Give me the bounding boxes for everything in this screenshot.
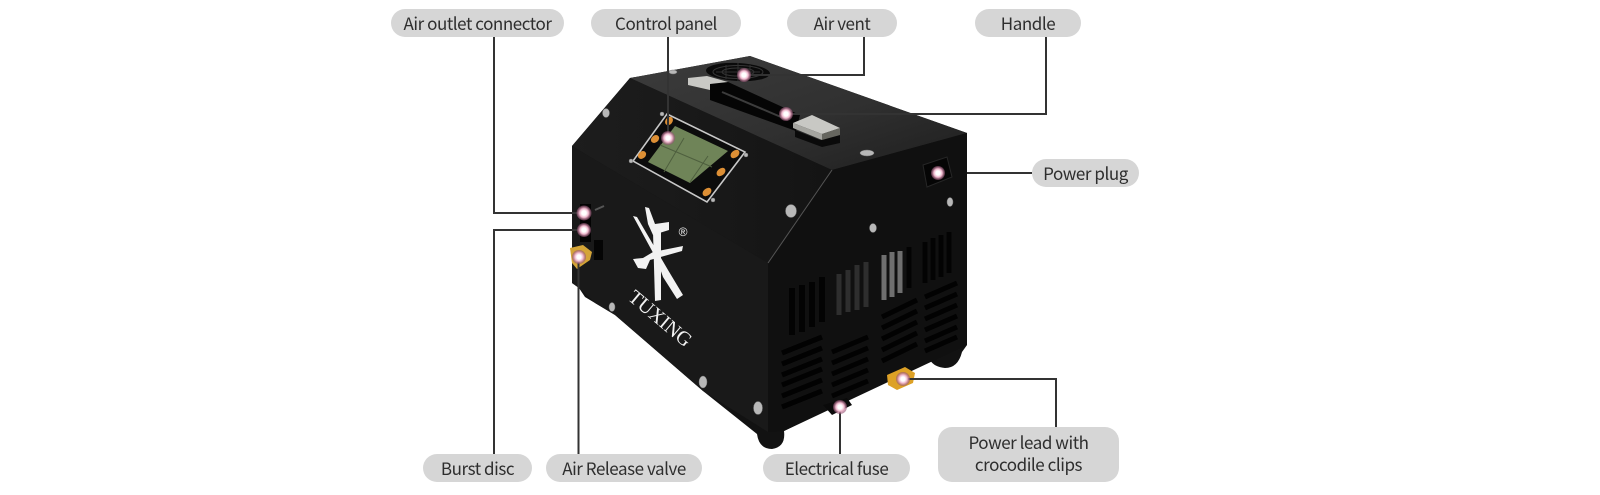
label: power lead with crocodile clips: crocodile clips	[975, 451, 1082, 476]
power switch	[923, 157, 952, 187]
label: air vent	[787, 9, 897, 37]
label: electrical fuse: Electrical fuse	[785, 455, 888, 480]
label: burst disc: Burst disc	[441, 455, 514, 480]
label: air outlet connector: Air outlet connector	[404, 10, 551, 35]
label: power lead with crocodile clips	[938, 427, 1119, 482]
label: handle	[975, 9, 1081, 37]
label: air release valve: Air Release valve	[562, 455, 686, 480]
fuse holder	[823, 398, 852, 415]
brand name: TUXING	[624, 286, 696, 352]
label: control panel	[591, 9, 741, 37]
right face vents	[782, 232, 957, 407]
machine body	[572, 56, 967, 449]
handle	[688, 76, 840, 147]
registered mark: ®	[679, 225, 688, 239]
control panel	[633, 114, 745, 202]
label: burst disc	[423, 454, 532, 482]
crocodile clip	[887, 367, 915, 390]
marker dots	[572, 68, 945, 414]
label: handle: Handle	[1001, 10, 1055, 35]
air vent fan	[706, 61, 770, 83]
leader lines	[494, 37, 1056, 454]
screws	[602, 70, 953, 414]
label: power lead with crocodile clips: Power lead with	[968, 429, 1089, 454]
brand logo	[624, 207, 696, 352]
label: control panel: Control panel	[615, 10, 717, 35]
label: electrical fuse	[763, 454, 910, 482]
label: air vent: Air vent	[814, 10, 870, 35]
label: power plug: Power plug	[1043, 160, 1128, 185]
left side connectors	[570, 204, 604, 269]
